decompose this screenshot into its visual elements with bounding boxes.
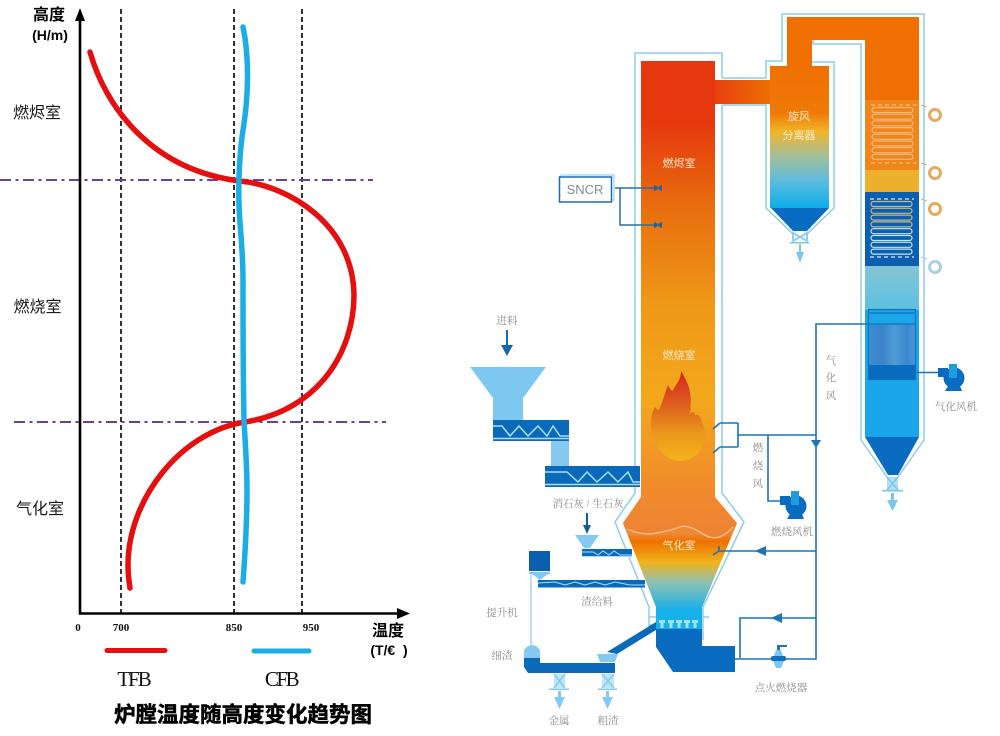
text: process labels: 风 (753, 478, 764, 490)
text: process labels: 燃烧风机 (771, 525, 813, 538)
tick labels: 0 (75, 622, 81, 634)
icon: flame (651, 371, 705, 461)
fuel feed: hopper and screw conveyors (470, 330, 640, 487)
axis title: height (32, 5, 68, 43)
zone label: combustion chamber: 燃烧室 (13, 298, 62, 316)
legend: TFB: TFB (117, 667, 151, 691)
limestone feed (575, 513, 632, 557)
text: process labels: 点火燃烧器 (755, 681, 808, 694)
curve: CFB temperature (239, 27, 248, 582)
SNCR unit: SNCR (567, 182, 603, 197)
SNCR unit (560, 175, 662, 228)
text: process labels: 气 (826, 354, 837, 367)
air piping (713, 324, 938, 659)
tick labels: 950 (303, 622, 320, 634)
axes (75, 8, 410, 619)
hopper valves and outlets (790, 233, 903, 511)
text: process labels (486, 314, 977, 727)
text: process labels: 粗渣 (598, 714, 619, 727)
slag discharge pipe (607, 622, 656, 654)
ash hopper (656, 629, 735, 672)
nozzles (659, 620, 698, 628)
text: furnace and separator labels (662, 109, 816, 552)
text: process labels: 金属 (548, 714, 570, 727)
backpass column (787, 17, 919, 475)
legend: CFB (254, 651, 309, 691)
axis title: temperature (370, 621, 408, 658)
text: process labels: 燃 (753, 441, 764, 454)
diagram: boiler process (470, 14, 977, 727)
text: furnace and separator labels: 气化室 (662, 538, 696, 552)
heat exchanger coil: orange (871, 105, 917, 163)
icon: gasification fan (938, 364, 964, 391)
curve: TFB temperature (90, 52, 354, 588)
text: furnace and separator labels: 燃烬室 (662, 156, 696, 170)
slag outlets (549, 674, 617, 709)
text: process labels: 细渣 (492, 649, 513, 662)
slag conveyor (524, 645, 618, 673)
bucket elevator (530, 574, 532, 645)
axis title: height: (H/m) (32, 27, 68, 43)
chart: furnace temperature vs height (0, 5, 410, 727)
zone boundary lines (0, 180, 386, 422)
reference temperature lines (121, 9, 302, 613)
text: process labels: 风 (826, 390, 837, 402)
icon: ignition burner (771, 645, 787, 668)
heat exchanger coil: blue (870, 199, 914, 257)
air preheater (868, 310, 916, 380)
tick labels (75, 622, 320, 634)
axis title: temperature: (T/€ ) (370, 642, 408, 658)
text: furnace and separator labels: 分离器 (782, 128, 816, 142)
interface wave (627, 526, 733, 538)
legend: CFB: CFB (265, 667, 299, 691)
legend: TFB (107, 650, 165, 691)
text: furnace and separator labels: 燃烧室 (662, 348, 696, 362)
text: process labels: 气化风机 (935, 400, 977, 413)
duct (715, 80, 771, 104)
text: process labels: 化 (826, 371, 837, 384)
tick labels: 700 (113, 622, 130, 634)
zone label: gasification chamber: 气化室 (16, 500, 64, 518)
chart title: 炉膛温度随高度变化趋势图 (114, 702, 372, 727)
text: furnace and separator labels: 旋风 (788, 109, 810, 123)
slag feed (529, 551, 645, 588)
text: process labels: 提升机 (486, 606, 518, 619)
axis title: temperature: 温度 (372, 621, 404, 640)
casing outlines (615, 14, 924, 640)
text: process labels: 消石灰 / 生石灰 (552, 497, 624, 510)
text: process labels: 进料 (496, 314, 518, 327)
furnace column (623, 61, 737, 629)
cyclone separator (770, 66, 829, 231)
steam ports (921, 105, 940, 272)
text: process labels: 渣给料 (581, 595, 613, 608)
icon: combustion fan (780, 491, 806, 519)
text: process labels: 烧 (753, 459, 764, 472)
axis title: height: 高度 (33, 5, 65, 24)
tick labels: 850 (226, 622, 243, 634)
zone label: burnout chamber: 燃烬室 (13, 104, 61, 122)
